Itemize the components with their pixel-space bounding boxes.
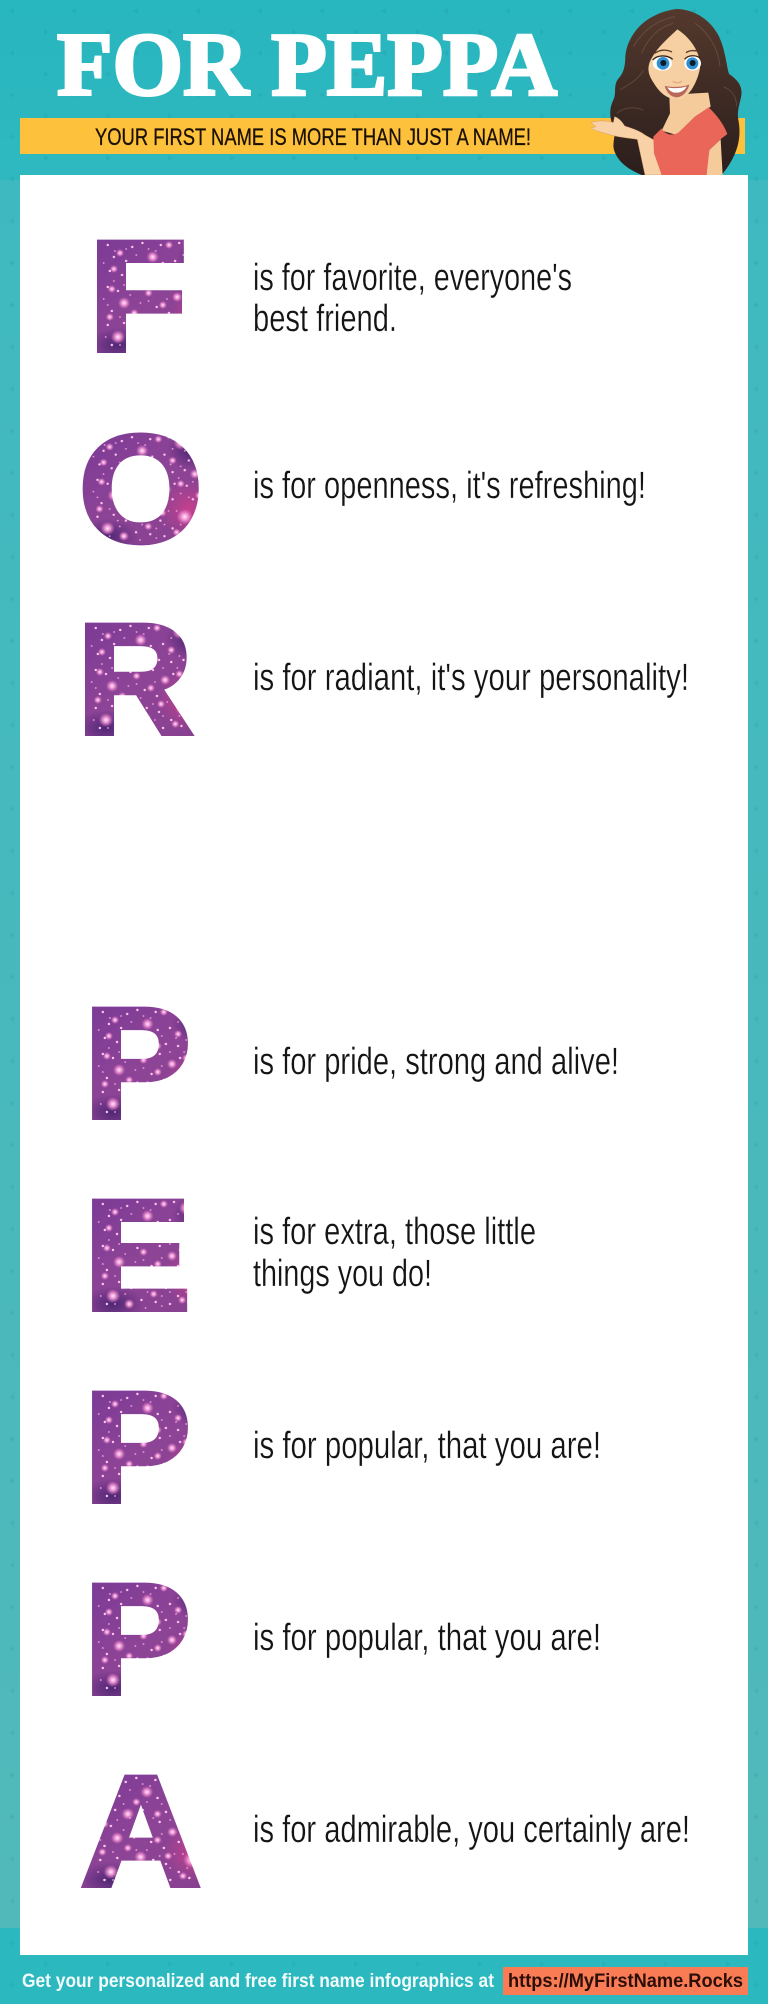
letter P second: P xyxy=(84,1361,190,1535)
mouth xyxy=(665,85,689,97)
text F: best friend. xyxy=(253,298,397,340)
hair highlights xyxy=(617,17,737,113)
text P: is for pride, strong and alive! xyxy=(253,1041,619,1083)
letter F: F xyxy=(89,209,187,384)
arm and hand xyxy=(591,117,662,175)
text P third: is for popular, that you are! xyxy=(253,1617,601,1659)
row R xyxy=(77,592,689,767)
row P second xyxy=(84,1361,601,1535)
right arm xyxy=(707,139,723,175)
footer text: Get your personalized and free first name infographics at xyxy=(22,1971,495,1992)
eyes xyxy=(653,50,701,71)
subtitle banner xyxy=(20,118,745,154)
text P second: is for popular, that you are! xyxy=(253,1425,601,1467)
letter E: E xyxy=(84,1169,190,1343)
face xyxy=(648,29,700,99)
hair xyxy=(610,9,742,175)
text F: is for favorite, everyone's xyxy=(253,257,572,299)
text E: is for extra, those little xyxy=(253,1211,536,1253)
neck xyxy=(662,93,711,135)
title: FOR PEPPA xyxy=(57,16,557,114)
row O xyxy=(79,404,646,573)
letter O: O xyxy=(79,404,202,573)
letter P third: P xyxy=(84,1553,190,1727)
row E xyxy=(84,1169,536,1343)
illustration: woman presenting xyxy=(591,9,742,175)
row F xyxy=(89,209,572,384)
row P xyxy=(84,977,619,1151)
text E: things you do! xyxy=(253,1253,432,1295)
letter R: R xyxy=(77,592,192,767)
row A xyxy=(81,1744,690,1919)
subtitle banner: YOUR FIRST NAME IS MORE THAN JUST A NAME! xyxy=(95,124,531,151)
footer xyxy=(22,1967,748,1995)
letter P: P xyxy=(84,977,190,1151)
text E xyxy=(253,1211,536,1295)
letter A: A xyxy=(81,1744,201,1919)
text O: is for openness, it's refreshing! xyxy=(253,465,646,507)
shirt xyxy=(653,107,727,175)
row P third xyxy=(84,1553,601,1727)
footer link badge: https://MyFirstName.Rocks xyxy=(508,1971,743,1992)
nose xyxy=(673,81,682,83)
text F xyxy=(253,257,572,340)
